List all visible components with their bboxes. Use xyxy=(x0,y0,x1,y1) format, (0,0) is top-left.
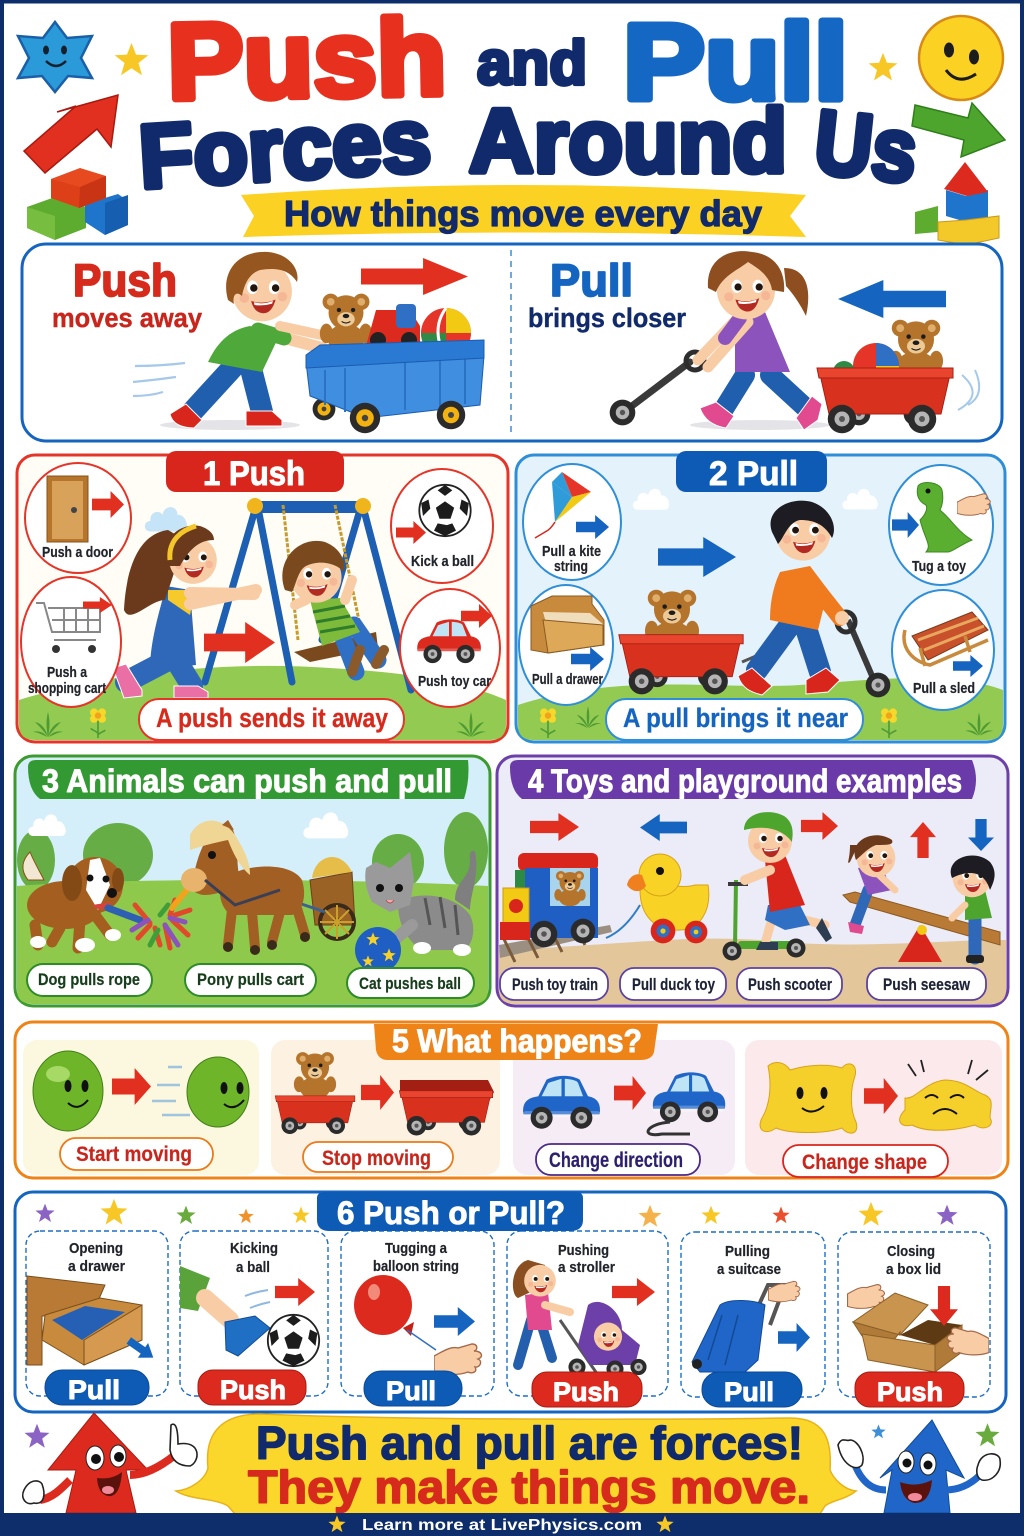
girl on seesaw xyxy=(848,835,895,934)
label: dog pulls rope xyxy=(27,964,152,996)
star xyxy=(871,1424,886,1438)
panel 5: what happens xyxy=(15,1022,1008,1178)
example: push a door: Push a door xyxy=(42,544,113,561)
card: pushing a stroller: a stroller xyxy=(558,1259,615,1276)
label: push toy train: Push toy train xyxy=(512,975,598,994)
banner text line 1: Push and pull are forces! xyxy=(256,1417,803,1469)
example: push a shopping cart: shopping cart xyxy=(28,680,106,697)
tag: pull: Pull xyxy=(68,1375,120,1405)
card: kicking a ball xyxy=(180,1231,328,1396)
rope xyxy=(108,880,195,948)
arrow: pull direction xyxy=(658,537,736,577)
card: opening a drawer xyxy=(26,1231,168,1396)
example: kick a ball: Kick a ball xyxy=(411,553,474,570)
card: kicking a ball: a ball xyxy=(236,1259,270,1276)
card: pushing a stroller: Pushing xyxy=(558,1242,609,1259)
pull string xyxy=(606,905,640,938)
boy on seesaw xyxy=(951,855,995,963)
header decoration: blue smiling star xyxy=(18,22,92,92)
example: pull a kite string xyxy=(523,464,621,580)
banner text line 2: They make things move. xyxy=(248,1461,810,1513)
card: kicking a ball: Kicking xyxy=(230,1240,278,1257)
tag: push xyxy=(532,1372,642,1407)
label: push scooter: Push scooter xyxy=(748,975,832,994)
example: push a door xyxy=(25,463,131,573)
example: kick a ball xyxy=(391,469,493,583)
girl pushing swing xyxy=(113,525,256,698)
card: closing a box lid: Closing xyxy=(887,1243,935,1260)
cell: start moving xyxy=(23,1040,259,1175)
title: Around xyxy=(469,92,787,192)
tag: push xyxy=(198,1370,306,1405)
boy pushing xyxy=(160,252,326,430)
arrow: push swing xyxy=(204,622,275,663)
label: pony pulls cart xyxy=(185,964,316,996)
dog xyxy=(23,852,124,952)
card: tugging a balloon string: balloon string xyxy=(373,1258,459,1275)
ball with stars xyxy=(355,927,401,973)
tag: push: Push xyxy=(220,1375,286,1405)
tag: push: Push xyxy=(553,1377,619,1407)
panel 6: push or pull quiz xyxy=(15,1192,1006,1412)
tag: pull xyxy=(364,1371,462,1406)
cell: change shape xyxy=(745,1040,1002,1177)
cell: stop moving: Stop moving xyxy=(322,1147,431,1170)
tag: pull xyxy=(702,1372,802,1407)
rubber duck toy xyxy=(627,854,709,943)
heading pill xyxy=(676,451,827,493)
header decoration: red diagonal arrow xyxy=(24,95,118,173)
header decoration: yellow star xyxy=(115,43,148,75)
heading: 4 Toys and playground examples xyxy=(528,763,962,799)
heading: 3 Animals can push and pull xyxy=(42,763,452,799)
title: and xyxy=(477,29,587,98)
example: push toy car xyxy=(400,589,500,707)
card: closing a box lid: a box lid xyxy=(886,1261,941,1278)
heading: pull brings closer: brings closer xyxy=(528,303,686,333)
card: tugging a balloon string xyxy=(341,1231,494,1396)
heading: pull brings closer xyxy=(528,255,686,333)
heading pill xyxy=(166,451,344,493)
card: pulling a suitcase: Pulling xyxy=(725,1243,770,1260)
card: opening a drawer: a drawer xyxy=(68,1258,125,1275)
heading: push moves away: Push xyxy=(73,255,177,306)
example: push a shopping cart xyxy=(21,577,121,707)
footer bar: Learn more at LivePhysics.com xyxy=(362,1517,642,1534)
arrow: pull left xyxy=(838,280,946,318)
panel 1: push xyxy=(17,451,508,742)
header decoration: toy blocks right xyxy=(915,162,999,245)
example: pull a kite string: Pull a kite xyxy=(542,543,601,560)
panel 2: pull xyxy=(516,451,1005,742)
cloud xyxy=(145,507,187,532)
boy pulling xyxy=(738,501,890,697)
motion lines xyxy=(133,363,185,396)
arrows xyxy=(530,812,994,858)
title: Forces xyxy=(136,90,434,208)
tag: pull xyxy=(45,1370,149,1405)
red wagon with bear xyxy=(817,320,979,433)
cell: change direction xyxy=(513,1040,735,1175)
caption pill xyxy=(139,699,404,740)
grass tufts and flowers xyxy=(540,706,993,738)
grass tufts and flowers xyxy=(33,708,486,738)
girl pulling xyxy=(610,251,830,430)
boy on swing xyxy=(282,541,384,672)
example: push a shopping cart: Push a xyxy=(47,664,88,681)
cell: change direction: Change direction xyxy=(549,1149,683,1172)
example: push toy car: Push toy car xyxy=(418,673,491,690)
scooter kid xyxy=(722,812,832,960)
mascot: blue arrow xyxy=(838,1420,1000,1513)
heading: push moves away xyxy=(52,255,202,333)
heading: 5 What happens? xyxy=(392,1023,642,1059)
background trees and grass xyxy=(17,812,488,1004)
tag: push: Push xyxy=(877,1377,943,1407)
example: tug a toy: Tug a toy xyxy=(912,558,967,575)
row of stars xyxy=(35,1199,958,1227)
header decoration: green arrow xyxy=(912,103,1005,157)
clouds xyxy=(633,489,878,510)
heading: pull brings closer: Pull xyxy=(550,255,633,306)
cell: change shape: Change shape xyxy=(802,1151,927,1174)
cat xyxy=(365,851,476,956)
example: pull a drawer: Pull a drawer xyxy=(532,671,603,688)
blue toy bin xyxy=(306,294,484,433)
panel 4: toys and playground xyxy=(497,756,1008,1006)
caption pill xyxy=(606,699,863,740)
pony and cart xyxy=(181,820,355,955)
ground xyxy=(499,939,1006,1004)
subtitle ribbon: How things move every day xyxy=(284,193,762,234)
bottom banner: speech bubble xyxy=(176,1414,856,1514)
label: dog pulls rope: Dog pulls rope xyxy=(38,970,140,989)
header decoration: small yellow star xyxy=(869,53,897,80)
card: tugging a balloon string: Tugging a xyxy=(385,1240,448,1257)
cell: stop moving xyxy=(271,1040,500,1175)
title: Us xyxy=(810,92,922,203)
label: push scooter xyxy=(737,968,842,1000)
card: pulling a suitcase xyxy=(681,1232,825,1397)
title xyxy=(136,0,922,208)
heading: 6 Push or Pull? xyxy=(337,1195,565,1231)
title: Push xyxy=(166,0,447,122)
example: pull a sled: Pull a sled xyxy=(913,680,975,697)
example: pull a sled xyxy=(892,590,994,710)
label: pull duck toy xyxy=(620,968,726,1000)
label: push seesaw xyxy=(867,968,986,1000)
caption pill: A pull brings it near xyxy=(623,703,848,733)
panel: push and pull overview xyxy=(22,244,1002,441)
example: tug a toy xyxy=(889,465,993,585)
star xyxy=(25,1424,49,1448)
card: pushing a stroller xyxy=(507,1231,668,1396)
label: push seesaw: Push seesaw xyxy=(883,975,971,994)
title: Pull xyxy=(623,1,848,122)
tag: push xyxy=(855,1372,964,1407)
example: pull a drawer xyxy=(519,585,613,705)
heading pill: 1 Push xyxy=(203,455,305,493)
caption pill: A push sends it away xyxy=(156,703,388,733)
card: pulling a suitcase: a suitcase xyxy=(717,1261,781,1278)
label: pony pulls cart: Pony pulls cart xyxy=(197,970,304,989)
subtitle ribbon xyxy=(241,185,806,237)
label: push toy train xyxy=(500,968,608,1000)
card: opening a drawer: Opening xyxy=(69,1240,123,1257)
star xyxy=(976,1423,1000,1446)
mascot: red arrow xyxy=(23,1413,197,1513)
heading pill: 2 Pull xyxy=(709,455,798,493)
tag: pull: Pull xyxy=(724,1377,774,1407)
wagon with bear xyxy=(619,590,770,694)
tag: pull: Pull xyxy=(386,1376,436,1406)
cell: start moving: Start moving xyxy=(76,1143,192,1166)
label: cat pushes ball xyxy=(347,968,474,998)
arrow: push right xyxy=(361,258,468,295)
toy train xyxy=(499,853,612,962)
example: pull a kite string: string xyxy=(554,558,588,575)
header decoration: yellow smiley xyxy=(919,16,1003,100)
grass xyxy=(518,678,1003,740)
label: pull duck toy: Pull duck toy xyxy=(632,975,715,994)
heading: push moves away: moves away xyxy=(52,303,202,333)
card: closing a box lid xyxy=(838,1232,990,1397)
grass xyxy=(19,666,506,740)
swing set xyxy=(205,498,411,690)
label: cat pushes ball: Cat pushes ball xyxy=(359,974,461,993)
seesaw xyxy=(843,835,1000,963)
footer bar xyxy=(0,1513,1024,1536)
header decoration: toy blocks left xyxy=(27,168,128,240)
panel 3: animals xyxy=(15,756,490,1006)
